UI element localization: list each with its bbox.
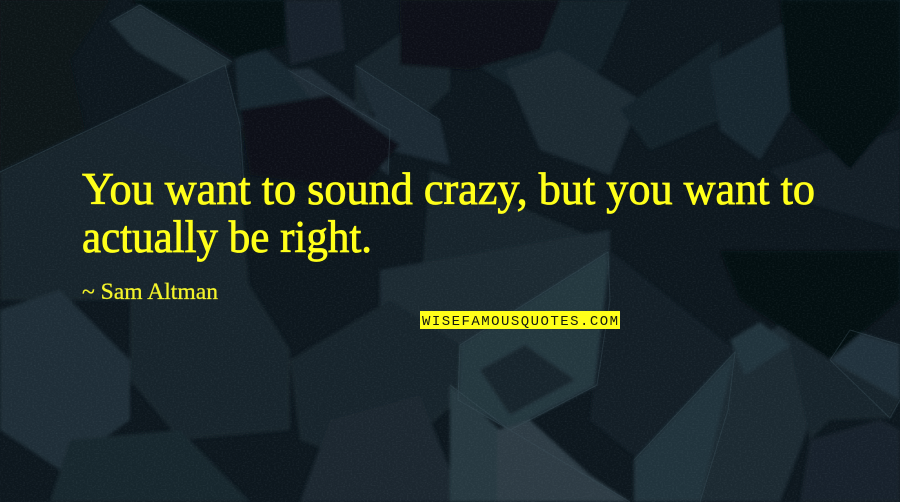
quote line 1: You want to sound crazy, but you want to xyxy=(82,164,815,214)
quote text xyxy=(82,164,815,262)
attribution: ~ Sam Altman xyxy=(82,279,219,304)
upper faces xyxy=(110,5,232,82)
watermark badge: WISEFAMOUSQUOTES.COM xyxy=(422,314,618,330)
quote line 2: actually be right. xyxy=(82,212,372,262)
dark hollows xyxy=(0,0,110,170)
